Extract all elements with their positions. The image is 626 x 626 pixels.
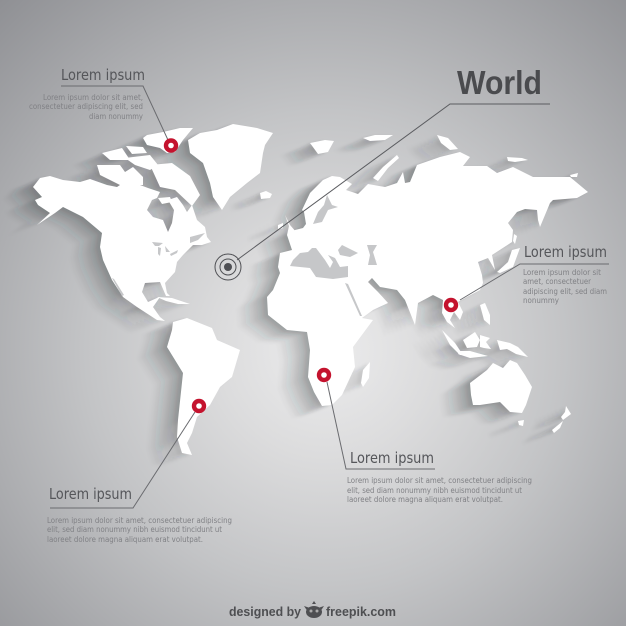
callout: africa: Lorem ipsum — [350, 449, 434, 467]
callout: south america: elit, sed diam nonummy nibh euismod tincidunt ut — [47, 525, 222, 534]
callout: africa: Lorem ipsum dolor sit amet, consectetuer adipiscing — [347, 476, 532, 485]
callout: asia: Lorem ipsum — [524, 243, 607, 261]
footer credit: freepik.com — [326, 605, 396, 619]
callout: asia: adipiscing elit, sed diam — [523, 287, 607, 296]
map shadows — [3, 125, 585, 467]
callout: arctic: Lorem ipsum dolor sit amet, — [43, 93, 143, 102]
callout: south america — [47, 412, 232, 544]
icon: freepik logo — [304, 601, 324, 618]
pin: africa — [319, 370, 329, 380]
callout: asia: amet, consectetuer — [523, 277, 592, 286]
world map continents — [33, 124, 588, 455]
pin: arctic — [166, 140, 176, 150]
callout: south america: Lorem ipsum dolor sit amet, consectetuer adipiscing — [47, 516, 232, 525]
callout: asia: Lorem ipsum dolor sit — [523, 268, 601, 277]
callout: south america: Lorem ipsum — [49, 485, 132, 503]
target marker — [215, 254, 241, 280]
callout: asia — [460, 243, 609, 305]
inland seas and lakes — [112, 195, 377, 316]
callout: africa: elit, sed diam nonummy nibh euismod tincidunt ut — [347, 486, 522, 495]
callout: arctic: Lorem ipsum — [61, 66, 145, 84]
callout: asia: nonummy — [523, 296, 559, 305]
callout: arctic — [29, 66, 168, 140]
footer credit: designed by — [229, 605, 301, 619]
pin: asia — [446, 300, 456, 310]
title: World: World — [457, 64, 542, 101]
callout: arctic: diam nonummy — [89, 112, 143, 121]
callout: africa — [327, 382, 532, 504]
footer credit — [229, 601, 396, 619]
callout: south america: laoreet dolore magna aliquam erat volutpat. — [47, 535, 203, 544]
callout: africa: laoreet dolore magna aliquam erat volutpat. — [347, 495, 503, 504]
title: World — [237, 64, 550, 260]
callout: arctic: consectetuer adipiscing elit, sed — [29, 102, 143, 111]
pin: south america — [194, 401, 204, 411]
